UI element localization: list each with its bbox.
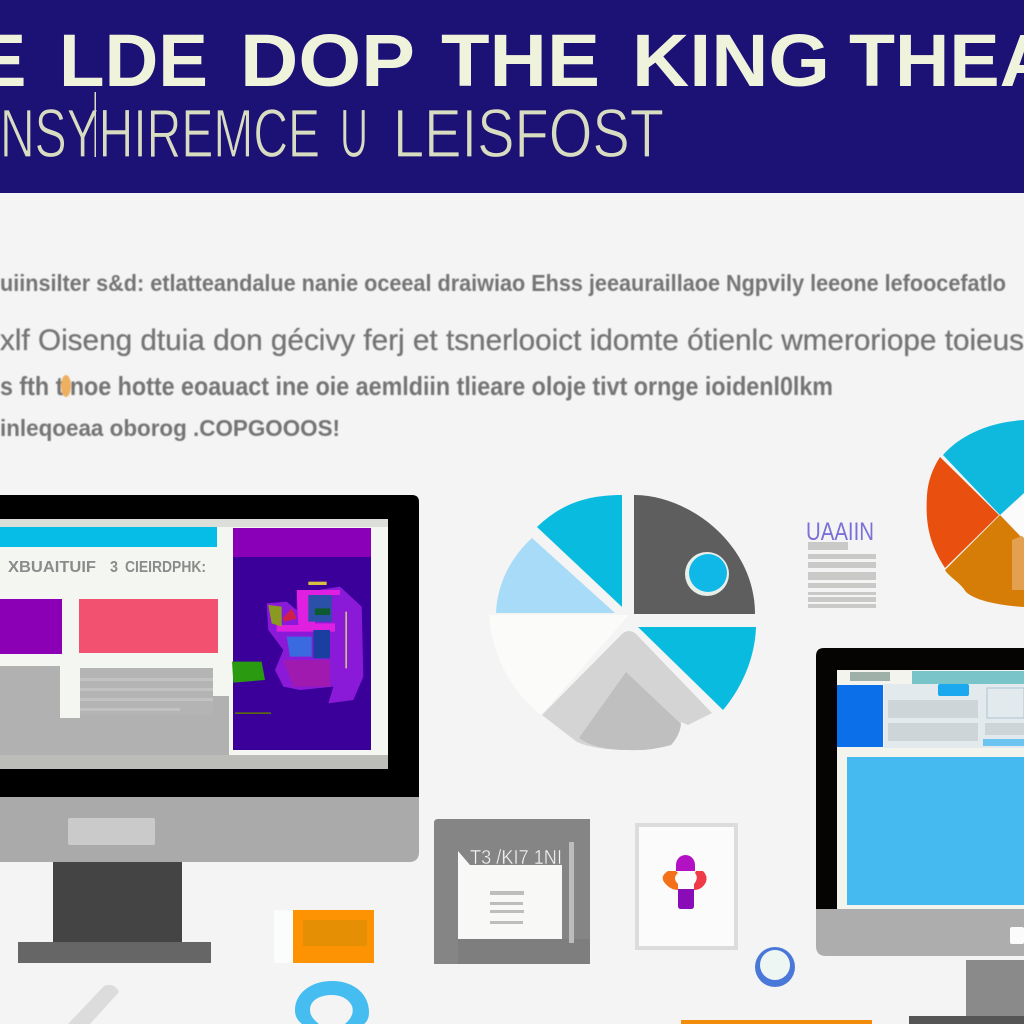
intro text block: inleqoeaa oborog .COPGOOOS! (0, 415, 340, 441)
window labels: T3 /KI7 1NI (470, 847, 562, 869)
cyan bar (0, 527, 217, 547)
right pie chart (927, 420, 1024, 607)
icon: logo figure (663, 855, 707, 909)
chin button (1010, 927, 1024, 944)
main pie chart (489, 495, 756, 750)
icon: blue ring (295, 981, 369, 1024)
screen heading: CIEIRDPHK: (125, 559, 206, 576)
monitor chin (0, 797, 419, 862)
card with logo icon (637, 825, 736, 948)
large blue panel (847, 757, 1024, 905)
pink block (79, 599, 218, 653)
panel illustration (232, 582, 363, 714)
chin button (68, 818, 155, 845)
slice: cyan top (537, 495, 622, 607)
slice: white (489, 615, 629, 715)
title: THE (441, 19, 600, 102)
slice: cyan (943, 420, 1024, 515)
slice: red-orange (927, 457, 999, 568)
light grey tool (68, 985, 119, 1024)
blue sidebar (837, 685, 883, 747)
title: DOP (240, 19, 415, 102)
title (0, 19, 1024, 102)
screen heading: XBUAITUIF (8, 559, 96, 576)
slice: cyan lower (638, 627, 756, 710)
bottom strip (983, 739, 1024, 746)
bezel (816, 648, 1024, 909)
screen (837, 670, 1024, 909)
dense document panel (884, 684, 1024, 748)
white centre wedge (1001, 495, 1024, 538)
top strip (912, 671, 1024, 684)
base (909, 1016, 1024, 1024)
purple panel (232, 528, 371, 750)
screen (0, 519, 388, 769)
purple block (0, 599, 62, 654)
intro text block: s fth tinoe hotte eoauact ine oie aemldiin tlieare oloje tivt ornge ioidenl0lkm (0, 371, 833, 401)
intro text block (0, 270, 1024, 441)
slice: grey (542, 631, 712, 750)
chin (816, 909, 1024, 956)
orange tag icon (274, 910, 374, 963)
subtitle: U (340, 95, 368, 172)
document lines (808, 542, 876, 608)
small document text (806, 518, 876, 608)
neck (966, 960, 1024, 1017)
small document text: UAAIIN (806, 518, 874, 546)
header banner (0, 0, 1024, 193)
title: KING (632, 19, 830, 102)
scrollbar (569, 842, 574, 943)
intro text block: xlf Oiseng dtuia don gécivy ferj et tsnerlooict idomte ótienlc wmeroriope toieus (0, 324, 1024, 357)
slice: light blue (496, 538, 615, 613)
window page (458, 851, 562, 939)
screen heading (8, 559, 206, 576)
slice: dark grey (634, 495, 755, 614)
subtitle: LEISFOST (393, 95, 664, 172)
subtitle: NSYHIREMCE (0, 95, 320, 172)
slice: ochre (945, 515, 1024, 607)
cyan tab (938, 684, 969, 696)
app window icon (434, 819, 590, 964)
orange strip (681, 1020, 872, 1024)
window lines (490, 891, 524, 924)
title: LDE (59, 19, 208, 102)
circle marker (685, 552, 729, 596)
grey content area (0, 666, 388, 769)
stand neck (53, 862, 182, 942)
subtitle (0, 92, 664, 172)
icon: small blue badge (755, 947, 795, 987)
bezel (0, 495, 419, 797)
left monitor (0, 495, 419, 963)
right monitor (816, 648, 1024, 1024)
screen heading: 3 (110, 559, 118, 576)
stand base (18, 942, 211, 963)
